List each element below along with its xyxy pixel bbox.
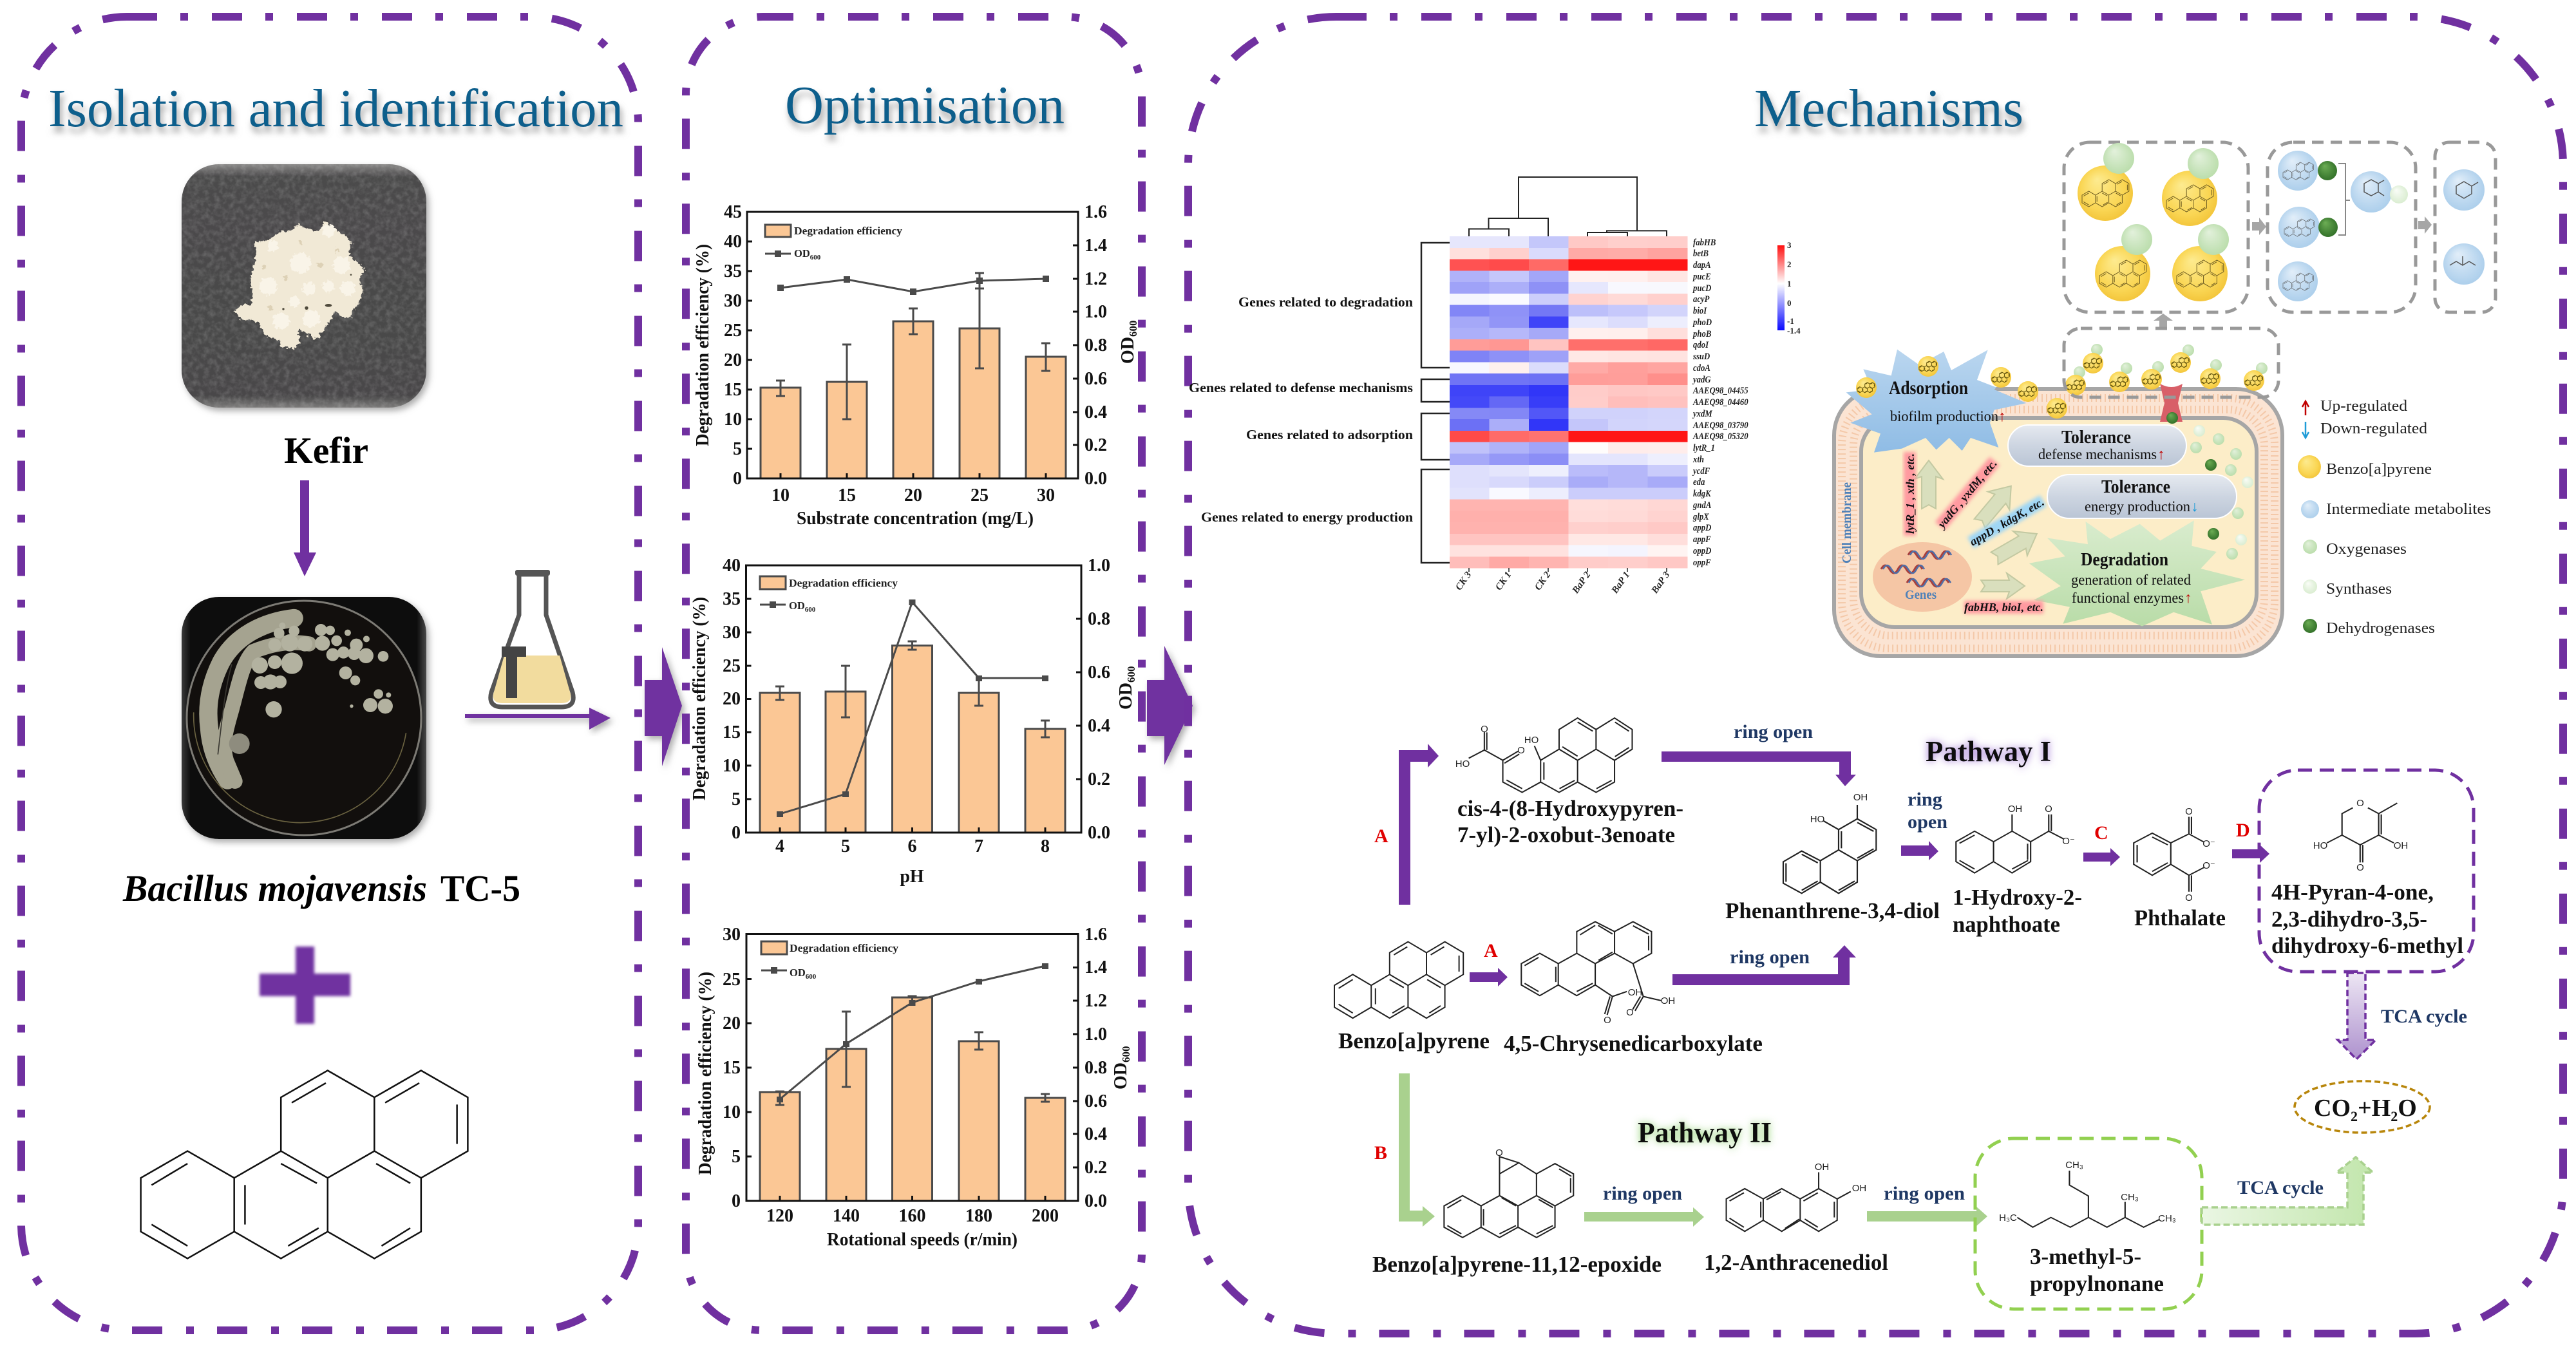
chart: pH: 20: [723, 689, 741, 709]
chart: pH: 0: [732, 823, 741, 843]
legend: cell diagram: Intermediate metabolites: [2326, 501, 2491, 518]
box: 3-methyl-5-propylnonane product: H₃C: [1999, 1212, 2017, 1223]
compound: phthalate: [2134, 806, 2226, 930]
photo: Bacillus colonies on plate: [182, 597, 426, 839]
callout: adsorption burst: biofilm production: [1890, 408, 1998, 424]
chart: pH: 25: [723, 656, 741, 676]
arrow: culture to optimisation: [465, 708, 611, 730]
heatmap dendrogram: [1469, 177, 1667, 236]
heatmap gene labels: oppF: [1693, 558, 1711, 568]
arrow C: [2083, 848, 2120, 866]
heatmap colour scale: 0: [1787, 298, 1792, 308]
chart: rotational speeds: 0.2: [1084, 1158, 1107, 1178]
chart: substrate concentration: 35: [724, 261, 742, 281]
gene label: yadG, yxdM: yadG , yxdM, etc.: [1934, 457, 2000, 531]
arrow: kefir to colonies: [294, 480, 316, 576]
compound: phenanthrene-3,4-diol: Phenanthrene-3,4-diol: [1725, 898, 1940, 923]
chart: substrate concentration: Degradation efficiency: [794, 225, 903, 237]
heatmap gene labels: AAEQ98_04455: [1692, 386, 1748, 396]
compound: phthalate: O⁻: [2202, 860, 2215, 871]
heatmap colour scale: -1.4: [1787, 326, 1801, 335]
chart: substrate concentration: Substrate concentration (mg/L): [797, 509, 1034, 529]
chart: pH: OD: [789, 599, 805, 612]
compound: 1,2-anthracenediol: [1704, 1162, 1888, 1275]
box: 3-methyl-5-propylnonane product: CH₃: [2121, 1192, 2139, 1203]
heatmap gene labels: dapA: [1693, 260, 1711, 270]
compound: phenanthrene-3,4-diol: [1725, 792, 1940, 923]
arrow B down to epoxide: [1399, 1073, 1435, 1227]
chart: substrate concentration: 600: [1127, 321, 1139, 337]
heatmap tick marks and sample labels: [1454, 568, 1672, 596]
box: 4H-pyran-4-one product: O: [2356, 862, 2364, 873]
chart: rotational speeds: 0.6: [1084, 1091, 1107, 1111]
label: Bacillus mojavensis TC-5: Bacillus mojavensis: [122, 867, 427, 909]
callout: tolerance defense mechanisms: [2008, 425, 2186, 466]
compound: 1,2-anthracenediol: OH: [1815, 1162, 1829, 1173]
chart: substrate concentration: 5: [733, 439, 742, 459]
chart: rotational speeds: 160: [899, 1206, 926, 1226]
chart: substrate concentration: 10: [724, 410, 742, 429]
chart: pH: 6: [908, 836, 917, 856]
chart: rotational speeds: Degradation efficiency (%): [696, 972, 715, 1175]
box: 4H-pyran-4-one product: [2259, 770, 2474, 972]
chart: rotational speeds: 0.4: [1084, 1124, 1107, 1144]
legend: cell diagram: Synthases: [2326, 581, 2392, 598]
heatmap gene labels: AAEQ98_04460: [1692, 397, 1748, 408]
chart: rotational speeds: 1.6: [1084, 925, 1107, 945]
arrow: TCA cycle, pathway II: [2202, 1157, 2373, 1225]
heatmap group labels: Genes related to adsorption: [1246, 427, 1413, 442]
compound: 1-hydroxy-2-naphthoate: O: [2045, 804, 2052, 815]
box: 4H-pyran-4-one product: 2,3-dihydro-3,5-: [2271, 907, 2427, 932]
heatmap gene labels: AAEQ98_03790: [1692, 420, 1748, 431]
label: Bacillus mojavensis TC-5: TC-5: [440, 867, 520, 909]
chart: substrate concentration: 0.4: [1084, 402, 1107, 422]
panel: optimisation: [686, 17, 1142, 1330]
box: extracellular binding region: [2064, 328, 2278, 397]
compound: 1-hydroxy-2-naphthoate: OH: [2008, 804, 2022, 815]
heatmap colour scale: 2: [1787, 259, 1792, 269]
heatmap gene labels: kdgK: [1693, 489, 1712, 499]
gene label: appD, kdgK: appD , kdgK, etc.: [1967, 495, 2047, 548]
diagram: degradation stages above cell: [2064, 142, 2496, 328]
chart: substrate concentration: 40: [724, 232, 742, 252]
compound: 1-hydroxy-2-naphthoate: 1-Hydroxy-2-: [1953, 885, 2082, 910]
label: ring open, middle: ring open: [1730, 947, 1810, 968]
diagram: degradation pathways: [1334, 718, 2474, 1309]
compound: cis-4-(8-hydroxypyren-7-yl)-2-oxobut-3-enoate: cis-4-(8-Hydroxypyren-: [1457, 796, 1683, 821]
legend: cell diagram: [2298, 398, 2491, 637]
label: ring open, epoxide step: ring open: [1603, 1183, 1682, 1204]
icon: plus sign: [260, 947, 350, 1024]
chart: pH: 40: [723, 556, 741, 576]
compound: cis-4-(8-hydroxypyren-7-yl)-2-oxobut-3-enoate: [1455, 718, 1683, 847]
compound: phenanthrene-3,4-diol: OH: [1853, 792, 1868, 803]
title: mechanisms: Mechanisms: [1754, 79, 2023, 138]
heatmap gene labels: eda: [1693, 477, 1705, 487]
callout: adsorption burst: [1846, 350, 2027, 453]
heatmap gene labels: qdoI: [1693, 340, 1709, 350]
heatmap gene labels: yxdM: [1692, 409, 1712, 419]
chart: substrate concentration: 20: [724, 350, 742, 370]
compound: 1-hydroxy-2-naphthoate: [1953, 804, 2082, 937]
product: CO2 + H2O: CO: [2314, 1095, 2351, 1122]
arrow D: [2232, 845, 2269, 863]
heatmap: differentially expressed genes: [1189, 177, 1801, 596]
compound: phthalate: Phthalate: [2134, 905, 2226, 930]
title: optimisation: Optimisation: [785, 75, 1065, 135]
chart: rotational speeds: 120: [766, 1206, 793, 1226]
compound: cis-4-(8-hydroxypyren-7-yl)-2-oxobut-3-enoate: O: [1481, 724, 1488, 735]
heatmap gene labels: lytR_1: [1693, 443, 1715, 453]
photo: kefir grains: [182, 164, 426, 408]
heatmap gene labels: oppD: [1693, 546, 1711, 556]
chart: pH: 1.0: [1088, 556, 1110, 576]
chart: substrate concentration: 1.0: [1084, 302, 1107, 322]
heatmap gene labels: ycdF: [1692, 466, 1710, 476]
chart: substrate concentration: 45: [724, 202, 742, 222]
legend: cell diagram: Oxygenases: [2326, 541, 2407, 558]
chart: pH: 0.0: [1088, 823, 1110, 843]
callout: degradation burst: functional enzymes: [2072, 590, 2184, 606]
heatmap colour scale: 3: [1787, 240, 1792, 250]
chart: rotational speeds: 1.2: [1084, 991, 1107, 1011]
box: 3-methyl-5-propylnonane product: [1975, 1138, 2202, 1309]
chart: rotational speeds: 200: [1032, 1206, 1059, 1226]
chart: rotational speeds: OD: [1111, 1062, 1131, 1090]
box: 3-methyl-5-propylnonane product: 3-methyl-5-: [2030, 1244, 2141, 1269]
compound: phthalate: O⁻: [2202, 838, 2215, 849]
heatmap gene labels: bioI: [1693, 306, 1707, 316]
chart: rotational speeds: 30: [723, 925, 741, 945]
chart: pH: 10: [723, 756, 741, 776]
arrow: optimisation to mechanisms: [1147, 646, 1193, 765]
label C: C: [2094, 822, 2108, 844]
heatmap gene labels: yadG: [1692, 375, 1711, 385]
compound: 4,5-chrysenedicarboxylate: OH: [1628, 987, 1642, 998]
chart: rotational speeds: Degradation efficiency: [790, 942, 899, 954]
gene label: fabHB, bioI: fabHB, bioI, etc.: [1964, 601, 2043, 614]
chart: pH: 4: [775, 836, 784, 856]
chart: pH: 5: [732, 789, 741, 809]
label: cell membrane: Cell membrane: [1840, 482, 1854, 563]
chart: substrate concentration: 25: [971, 486, 989, 505]
chart: rotational speeds: 25: [723, 970, 741, 990]
heatmap gene labels: acyP: [1693, 294, 1710, 305]
compound: 4,5-chrysenedicarboxylate: [1504, 921, 1763, 1056]
label: TCA cycle, pathway I: TCA cycle: [2381, 1006, 2467, 1027]
heatmap gene labels: phoB: [1692, 329, 1711, 339]
heatmap gene labels: pucE: [1692, 272, 1711, 282]
arrow: stage one to two: [2252, 218, 2266, 235]
callout: tolerance defense mechanisms: defense mechanisms: [2038, 446, 2157, 462]
compound: 1,2-anthracenediol: OH: [1852, 1183, 1866, 1194]
legend: cell diagram: Dehydrogenases: [2326, 620, 2435, 637]
chart: substrate concentration: 10: [772, 486, 790, 505]
chart: pH: 30: [723, 623, 741, 643]
arrow: chrysenedicarboxylate to phenanthrene diol: [1672, 945, 1856, 985]
icon: culture flask: [491, 570, 573, 707]
heatmap tick marks and sample labels: CK 3: [1454, 570, 1474, 592]
heatmap gene labels: betB: [1693, 249, 1709, 259]
chart: pH: 0.4: [1088, 716, 1110, 736]
chart: substrate concentration: 0.8: [1084, 335, 1107, 355]
label: ring open, short: [1908, 789, 1947, 833]
arrow: phenanthrene diol to naphthoate: [1901, 841, 1938, 860]
box: final metabolites: [2435, 142, 2496, 312]
icon: genes: [1873, 542, 1972, 612]
chart: rotational speeds: 600: [1120, 1046, 1132, 1062]
chart: substrate concentration: 0.6: [1084, 369, 1107, 389]
compound: 4,5-chrysenedicarboxylate: 4,5-Chrysenedicarboxylate: [1504, 1031, 1763, 1056]
chart: rotational speeds: 180: [965, 1206, 992, 1226]
box: 4H-pyran-4-one product: HO: [2313, 840, 2327, 851]
chart: rotational speeds: 10: [723, 1102, 741, 1122]
callout: tolerance energy production: [2047, 475, 2237, 518]
product: CO2 + H2O: 2: [2351, 1108, 2358, 1124]
heatmap tick marks and sample labels: BaP 2: [1570, 570, 1593, 596]
heatmap tick marks and sample labels: BaP 3: [1649, 570, 1672, 596]
chart: pH: Degradation efficiency (%): [690, 597, 710, 800]
callout: degradation burst: ↑: [2184, 590, 2192, 606]
label: Kefir: Kefir: [284, 429, 368, 471]
chart: rotational speeds: 0.0: [1084, 1191, 1107, 1211]
callout: tolerance energy production: energy production: [2085, 498, 2190, 514]
chart: rotational speeds: 20: [723, 1014, 741, 1033]
box: 4H-pyran-4-one product: 4H-Pyran-4-one,: [2271, 880, 2434, 905]
callout: degradation burst: generation of related: [2071, 572, 2191, 588]
legend: cell diagram: Up-regulated: [2320, 398, 2407, 415]
chart: pH: 0.6: [1088, 663, 1110, 683]
heatmap gene labels: ssuD: [1692, 352, 1710, 362]
arrow: lower box up to stage one: [2154, 314, 2173, 328]
arrow A up to cis-4 compound: [1399, 744, 1439, 905]
chart: rotational speeds: OD: [790, 967, 806, 979]
callout: tolerance defense mechanisms: Tolerance: [2061, 428, 2131, 448]
legend: cell diagram: Benzo[a]pyrene: [2326, 461, 2432, 478]
title: isolation and identification: Isolation and identification: [48, 79, 623, 138]
chart: substrate concentration: 30: [1037, 486, 1055, 505]
chart: pH: 0.2: [1088, 769, 1110, 789]
membrane channel: [2160, 384, 2183, 422]
panel: mechanisms: [1188, 17, 2563, 1334]
label: ring open, short: ring: [1908, 789, 1942, 810]
compound: benzo[a]pyrene: [1334, 941, 1490, 1053]
arrow: TCA cycle, pathway I: [2338, 973, 2376, 1059]
label D: D: [2236, 820, 2250, 841]
compound: cis-4-(8-hydroxypyren-7-yl)-2-oxobut-3-enoate: 7-yl)-2-oxobut-3enoate: [1457, 822, 1675, 847]
compound: cis-4-(8-hydroxypyren-7-yl)-2-oxobut-3-enoate: O: [1517, 745, 1525, 756]
chart: rotational speeds: 140: [833, 1206, 860, 1226]
heatmap colour scale: -1: [1787, 316, 1794, 326]
chart: pH: Degradation efficiency: [789, 577, 898, 589]
chart: substrate concentration: 0.0: [1084, 469, 1107, 489]
product: CO2 + H2O: O: [2398, 1095, 2417, 1122]
box: 3-methyl-5-propylnonane product: CH₃: [2158, 1213, 2176, 1224]
heading: Pathway I: Pathway I: [1926, 735, 2051, 768]
chart: substrate concentration: 0.2: [1084, 435, 1107, 455]
compound: 4,5-chrysenedicarboxylate: O: [1626, 1007, 1634, 1018]
chart: rotational speeds: Rotational speeds (r/min): [827, 1230, 1018, 1250]
cell cytoplasm: [1861, 418, 2257, 627]
structure: benzo[a]pyrene: [141, 1070, 468, 1258]
heatmap group labels: Genes related to energy production: [1201, 509, 1413, 525]
heatmap group brackets: [1421, 243, 1450, 563]
heatmap group labels: Genes related to degradation: [1238, 294, 1413, 310]
product: CO2 + H2O: 2: [2391, 1108, 2398, 1124]
compound: benzo[a]pyrene-11,12-epoxide: O: [1495, 1147, 1503, 1158]
chart: pH: 5: [841, 836, 850, 856]
box: 4H-pyran-4-one product: OH: [2394, 840, 2408, 851]
chart: substrate concentration: 600: [810, 254, 821, 261]
heatmap tick marks and sample labels: CK 2: [1533, 570, 1553, 592]
chart: pH: 7: [974, 836, 983, 856]
arrow: cis-4 compound to phenanthrene diol: [1662, 751, 1856, 786]
chart: substrate concentration: 0: [733, 469, 742, 489]
arrow: isolation to optimisation: [645, 647, 682, 766]
compound: phthalate: O: [2185, 892, 2193, 903]
chart: pH: pH: [900, 867, 924, 887]
chart: substrate concentration: 1.6: [1084, 202, 1107, 222]
enzymes released in cytoplasm: [2166, 412, 2253, 560]
legend: cell diagram: Down-regulated: [2320, 420, 2427, 437]
heatmap gene labels: xth: [1692, 455, 1704, 465]
chart: rotational speeds: 5: [732, 1147, 741, 1167]
chart: substrate concentration: 30: [724, 291, 742, 311]
callout: degradation burst: [2029, 520, 2245, 626]
chart: pH: 600: [1125, 666, 1137, 683]
heatmap cells: [1450, 236, 1687, 569]
heatmap gene labels: appD: [1693, 523, 1711, 533]
chart: substrate concentration: 1.4: [1084, 236, 1107, 256]
product: CO2 + H2O: +H: [2358, 1095, 2391, 1122]
arrow: benzo[a]pyrene to chrysenedicarboxylate: [1470, 968, 1508, 986]
label: TCA cycle, pathway II: TCA cycle: [2237, 1177, 2324, 1198]
heatmap tick marks and sample labels: CK 1: [1493, 570, 1513, 592]
heatmap group labels: [1189, 294, 1413, 525]
arrow: epoxide to anthracenediol: [1584, 1207, 1704, 1227]
chart: substrate concentration: 15: [724, 380, 742, 400]
heatmap gene labels: phoD: [1692, 317, 1712, 328]
compound: phthalate: O: [2185, 806, 2193, 817]
compound: benzo[a]pyrene-11,12-epoxide: [1372, 1147, 1662, 1277]
compound: 4,5-chrysenedicarboxylate: OH: [1661, 995, 1675, 1006]
heatmap group labels: Genes related to defense mechanisms: [1189, 380, 1413, 395]
chart: rotational speeds: 0: [732, 1191, 741, 1211]
compound: cis-4-(8-hydroxypyren-7-yl)-2-oxobut-3-enoate: HO: [1524, 735, 1539, 746]
compound: 1-hydroxy-2-naphthoate: O⁻: [2062, 836, 2075, 847]
chart: substrate concentration: 1.2: [1084, 269, 1107, 289]
chart: pH: 35: [723, 589, 741, 609]
box: benzo[a]pyrene bound to oxygenases: [2064, 142, 2248, 312]
compound: 4,5-chrysenedicarboxylate: O: [1604, 1015, 1611, 1026]
compound: benzo[a]pyrene-11,12-epoxide: Benzo[a]pyrene-11,12-epoxide: [1372, 1252, 1662, 1277]
chart: substrate concentration: 20: [904, 486, 922, 505]
chart: pH: OD: [1116, 683, 1136, 710]
callout: adsorption burst: Adsorption: [1889, 377, 1968, 399]
label A lower: A: [1484, 940, 1498, 961]
heatmap colour scale: [1777, 240, 1801, 335]
compound: benzo[a]pyrene: Benzo[a]pyrene: [1338, 1028, 1490, 1053]
compound: phenanthrene-3,4-diol: HO: [1810, 814, 1824, 825]
gene label: lytR_1, xth: lytR_1 , xth , etc.: [1904, 453, 1917, 534]
heading: Pathway II: Pathway II: [1638, 1117, 1772, 1149]
arrow: stage two to three: [2418, 216, 2432, 234]
heatmap colour scale: 1: [1787, 279, 1792, 288]
cell membrane: [1834, 389, 2282, 656]
chart: substrate concentration: [693, 202, 1139, 529]
chart: substrate concentration: 15: [838, 486, 856, 505]
chart: substrate concentration: Degradation efficiency (%): [693, 244, 713, 446]
heatmap gene labels: glpX: [1692, 512, 1709, 522]
heatmap tick marks and sample labels: BaP 1: [1609, 570, 1632, 596]
icon: genes: Genes: [1905, 588, 1937, 602]
box: 4H-pyran-4-one product: O: [2356, 798, 2364, 809]
heatmap gene labels: gndA: [1692, 500, 1711, 511]
arrow: anthracenediol to nonane: [1867, 1207, 1987, 1226]
heatmap gene labels: appF: [1693, 534, 1711, 545]
chart: pH: 0.8: [1088, 609, 1110, 629]
compound: 1,2-anthracenediol: 1,2-Anthracenediol: [1704, 1250, 1888, 1275]
heatmap gene labels: AAEQ98_05320: [1692, 431, 1748, 442]
chart: pH: 8: [1041, 836, 1050, 856]
chart: rotational speeds: 600: [806, 973, 817, 981]
product: CO2 + H2O: [2295, 1081, 2430, 1133]
box: 4H-pyran-4-one product: dihydroxy-6-methyl: [2271, 933, 2463, 958]
chart: rotational speeds: 1.4: [1084, 958, 1107, 977]
heatmap gene labels: cdoA: [1693, 363, 1710, 373]
chart: rotational speeds: 1.0: [1084, 1024, 1107, 1044]
chart: pH: [690, 556, 1137, 887]
heatmap gene labels: fabHB: [1693, 238, 1716, 248]
compound: 1-hydroxy-2-naphthoate: naphthoate: [1953, 912, 2060, 937]
heatmap gene labels: pucD: [1692, 283, 1711, 294]
chart: substrate concentration: OD: [1118, 337, 1138, 364]
label: ring open, anthracenediol step: ring open: [1884, 1183, 1965, 1204]
chart: pH: 15: [723, 722, 741, 742]
chart: rotational speeds: 0.8: [1084, 1058, 1107, 1078]
compound: cis-4-(8-hydroxypyren-7-yl)-2-oxobut-3-enoate: HO: [1455, 759, 1470, 769]
diagram: bacterial cell: [1834, 328, 2282, 656]
label: ring open, short: open: [1908, 811, 1947, 833]
box: 3-methyl-5-propylnonane product: propylnonane: [2030, 1271, 2164, 1296]
chart: pH: 600: [805, 606, 816, 614]
heatmap gene labels: [1692, 238, 1748, 568]
panel: isolation and identification: [21, 17, 638, 1330]
label A upper: A: [1374, 825, 1388, 847]
callout: tolerance energy production: ↓: [2191, 498, 2199, 514]
callout: adsorption burst: ↑: [1998, 408, 2005, 424]
label B: B: [1374, 1142, 1387, 1164]
chart: rotational speeds: [696, 925, 1132, 1250]
callout: tolerance defense mechanisms: ↑: [2157, 446, 2165, 462]
chart: rotational speeds: 15: [723, 1058, 741, 1078]
label: ring open, upper: ring open: [1734, 721, 1813, 742]
callout: degradation burst: Degradation: [2081, 550, 2168, 570]
callout: tolerance energy production: Tolerance: [2101, 477, 2170, 497]
box: 3-methyl-5-propylnonane product: CH₃: [2065, 1160, 2083, 1171]
benzo[a]pyrene particles on the membrane: [1856, 344, 2268, 419]
gene arrows: [1915, 460, 2044, 599]
box: intermediate metabolites with dehydrogenases: [2268, 142, 2416, 312]
chart: substrate concentration: 25: [724, 321, 742, 341]
chart: substrate concentration: OD: [794, 247, 810, 259]
